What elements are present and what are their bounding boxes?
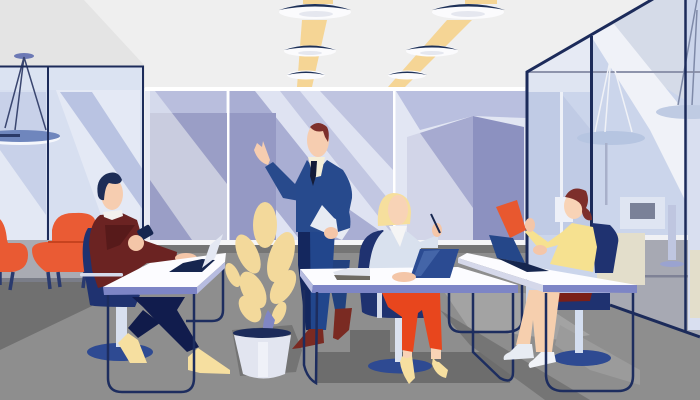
near leg and shoe, standing man <box>292 230 335 349</box>
papers in hand <box>310 202 350 240</box>
rear legs, middle desk <box>449 285 522 332</box>
light sweater <box>369 230 438 280</box>
head, standing man <box>307 123 329 157</box>
red armchairs <box>0 213 95 290</box>
floor <box>0 240 700 400</box>
potted plant <box>222 202 302 378</box>
desk, right <box>458 253 637 391</box>
red folder and hand <box>496 200 547 255</box>
office chair, blonde woman <box>358 230 432 374</box>
far leg and shoe, man <box>118 310 160 363</box>
orange trousers <box>382 293 442 352</box>
ceiling light beams <box>297 0 497 87</box>
laptop, blonde woman <box>392 249 459 282</box>
panoramic window with city view <box>145 90 530 242</box>
seated blonde woman <box>358 193 448 384</box>
office chair, man <box>83 228 153 361</box>
white window frame <box>145 87 525 242</box>
head, brunette woman <box>564 189 592 220</box>
sweater V-neck shading <box>105 225 135 250</box>
seated brunette woman <box>496 189 618 368</box>
hand on keyboard, man <box>175 253 197 263</box>
right room frame <box>527 0 700 337</box>
white sneakers <box>504 344 556 368</box>
ceiling lamps <box>279 4 505 80</box>
faded furniture behind glass <box>555 197 700 318</box>
left room frame <box>0 66 143 240</box>
yellow sweater <box>525 223 597 272</box>
hand with phone, man <box>128 224 154 251</box>
standing man in blue suit <box>254 123 352 349</box>
closed notebook on desk <box>333 268 370 280</box>
left glass meeting room <box>0 66 143 282</box>
suit jacket <box>296 160 352 232</box>
plant pot <box>233 328 291 378</box>
hanging ring lamp, left room <box>0 53 60 145</box>
bare legs <box>516 290 560 352</box>
raised arm and hand <box>254 141 307 202</box>
laptop, brunette woman <box>489 235 549 272</box>
far leg and shoe, standing man <box>325 260 352 340</box>
shirt and tie <box>308 157 325 186</box>
head, blonde woman <box>378 193 411 247</box>
ceiling <box>0 0 700 90</box>
armrest, man <box>80 273 123 276</box>
shoes and ankles, blonde woman <box>400 347 448 384</box>
faded hanging lamps behind glass <box>577 0 700 205</box>
right glass meeting room <box>526 0 700 338</box>
seated man with phone <box>80 172 230 374</box>
head, man <box>97 172 123 220</box>
laptop, left <box>169 234 223 272</box>
hand with pen <box>431 214 442 237</box>
desk, left <box>103 253 226 392</box>
desk, middle <box>300 267 518 383</box>
office chair, brunette woman <box>545 223 618 366</box>
near leg and shoe, man <box>132 297 230 374</box>
burgundy sweater, man <box>89 213 177 288</box>
